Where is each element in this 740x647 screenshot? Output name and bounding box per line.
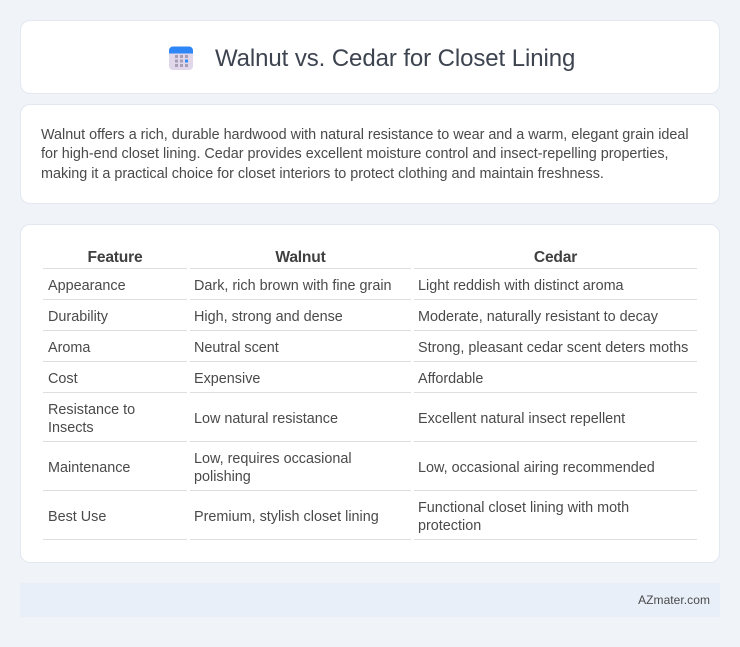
- header: Walnut: Walnut: [275, 249, 326, 266]
- intro text: for high-end closet lining. Cedar provides excellent moisture control and insect-repelling properties,: [41, 146, 668, 162]
- Cedar maintenance: Low, occasional airing recommended: [418, 460, 655, 476]
- row: Best Use: Best Use: [48, 509, 106, 525]
- Walnut appearance: Dark, rich brown with fine grain: [194, 278, 392, 294]
- Walnut cost: Expensive: [194, 371, 260, 387]
- footer credit: AZmater.com: [638, 593, 710, 607]
- row: Appearance: Appearance: [48, 278, 126, 294]
- intro text: Walnut offers a rich, durable hardwood with natural resistance to wear and a warm, elegant grain ideal: [41, 127, 688, 143]
- Cedar insect resistance: Excellent natural insect repellent: [418, 411, 625, 427]
- Cedar cost: Affordable: [418, 371, 483, 387]
- row: Durability: Durability: [48, 309, 108, 325]
- intro text: making it a practical choice for closet interiors to protect clothing and maintain freshness.: [41, 166, 604, 182]
- panel: comparison table: [20, 224, 720, 563]
- Walnut maintenance: polishing: [194, 469, 251, 485]
- row: Aroma: Aroma: [48, 340, 90, 356]
- title: Walnut vs. Cedar for Closet Lining: [215, 45, 575, 72]
- header: Feature: Feature: [88, 249, 142, 266]
- row: Cost: Cost: [48, 371, 78, 387]
- Cedar aroma: Strong, pleasant cedar scent deters moths: [418, 340, 688, 356]
- row: Resistance to Insects: Resistance to: [48, 402, 135, 418]
- Cedar best use: protection: [418, 518, 481, 534]
- header: Cedar: Cedar: [534, 249, 577, 266]
- Walnut best use: Premium, stylish closet lining: [194, 509, 379, 525]
- Walnut maintenance: [194, 451, 352, 485]
- footer bar: [20, 583, 720, 617]
- icon: calendar: [169, 46, 193, 70]
- intro text: [41, 127, 688, 182]
- row: Maintenance: Maintenance: [48, 460, 130, 476]
- Walnut durability: High, strong and dense: [194, 309, 343, 325]
- row: Resistance to Insects: [48, 402, 135, 436]
- Cedar appearance: Light reddish with distinct aroma: [418, 278, 624, 294]
- Walnut maintenance: Low, requires occasional: [194, 451, 352, 467]
- Walnut insect resistance: Low natural resistance: [194, 411, 338, 427]
- Cedar durability: Moderate, naturally resistant to decay: [418, 309, 658, 325]
- Cedar best use: [418, 500, 629, 534]
- Walnut aroma: Neutral scent: [194, 340, 279, 356]
- panel: introduction: [20, 104, 720, 204]
- Cedar best use: Functional closet lining with moth: [418, 500, 629, 516]
- panel: header: [20, 20, 720, 94]
- row: Resistance to Insects: Insects: [48, 420, 94, 436]
